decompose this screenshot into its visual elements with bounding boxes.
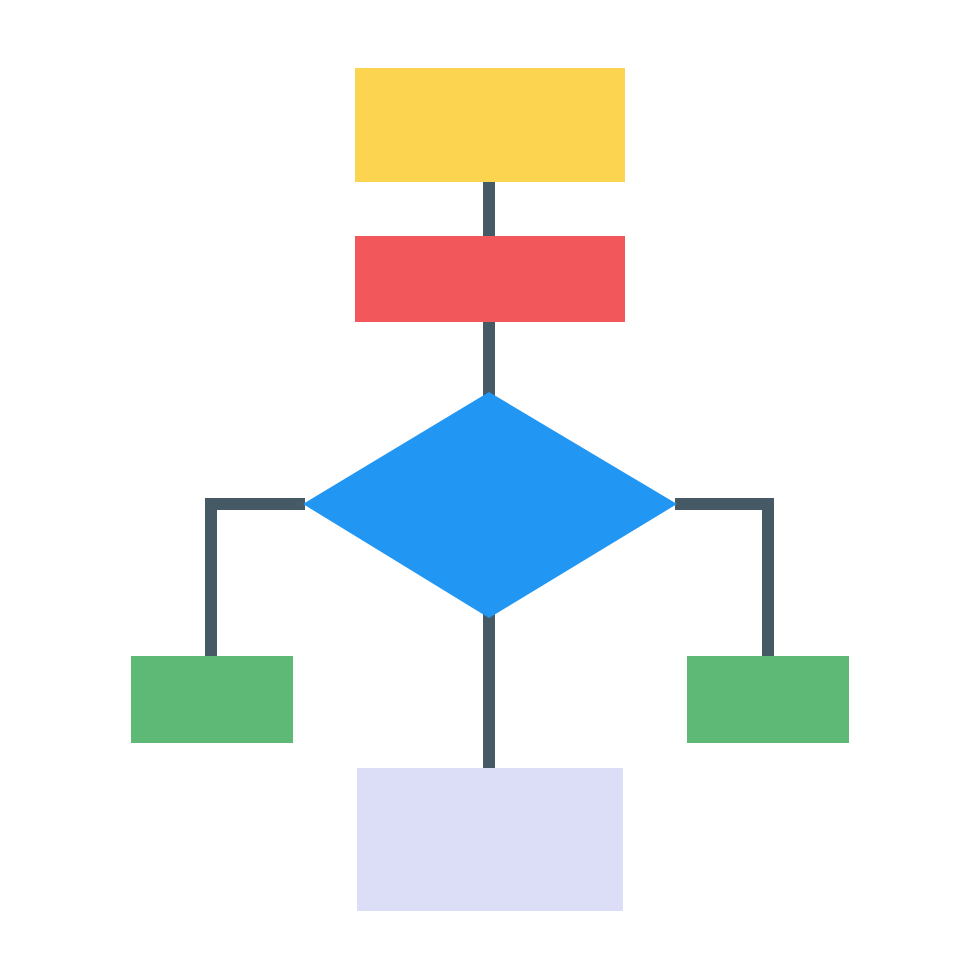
process box (red) (355, 236, 625, 322)
end box (lavender) (357, 768, 623, 911)
connectors (205, 180, 774, 770)
right outcome box (green) (687, 656, 849, 743)
left outcome box (green) (131, 656, 293, 743)
start box (yellow) (355, 68, 625, 182)
decision diamond (303, 392, 677, 618)
